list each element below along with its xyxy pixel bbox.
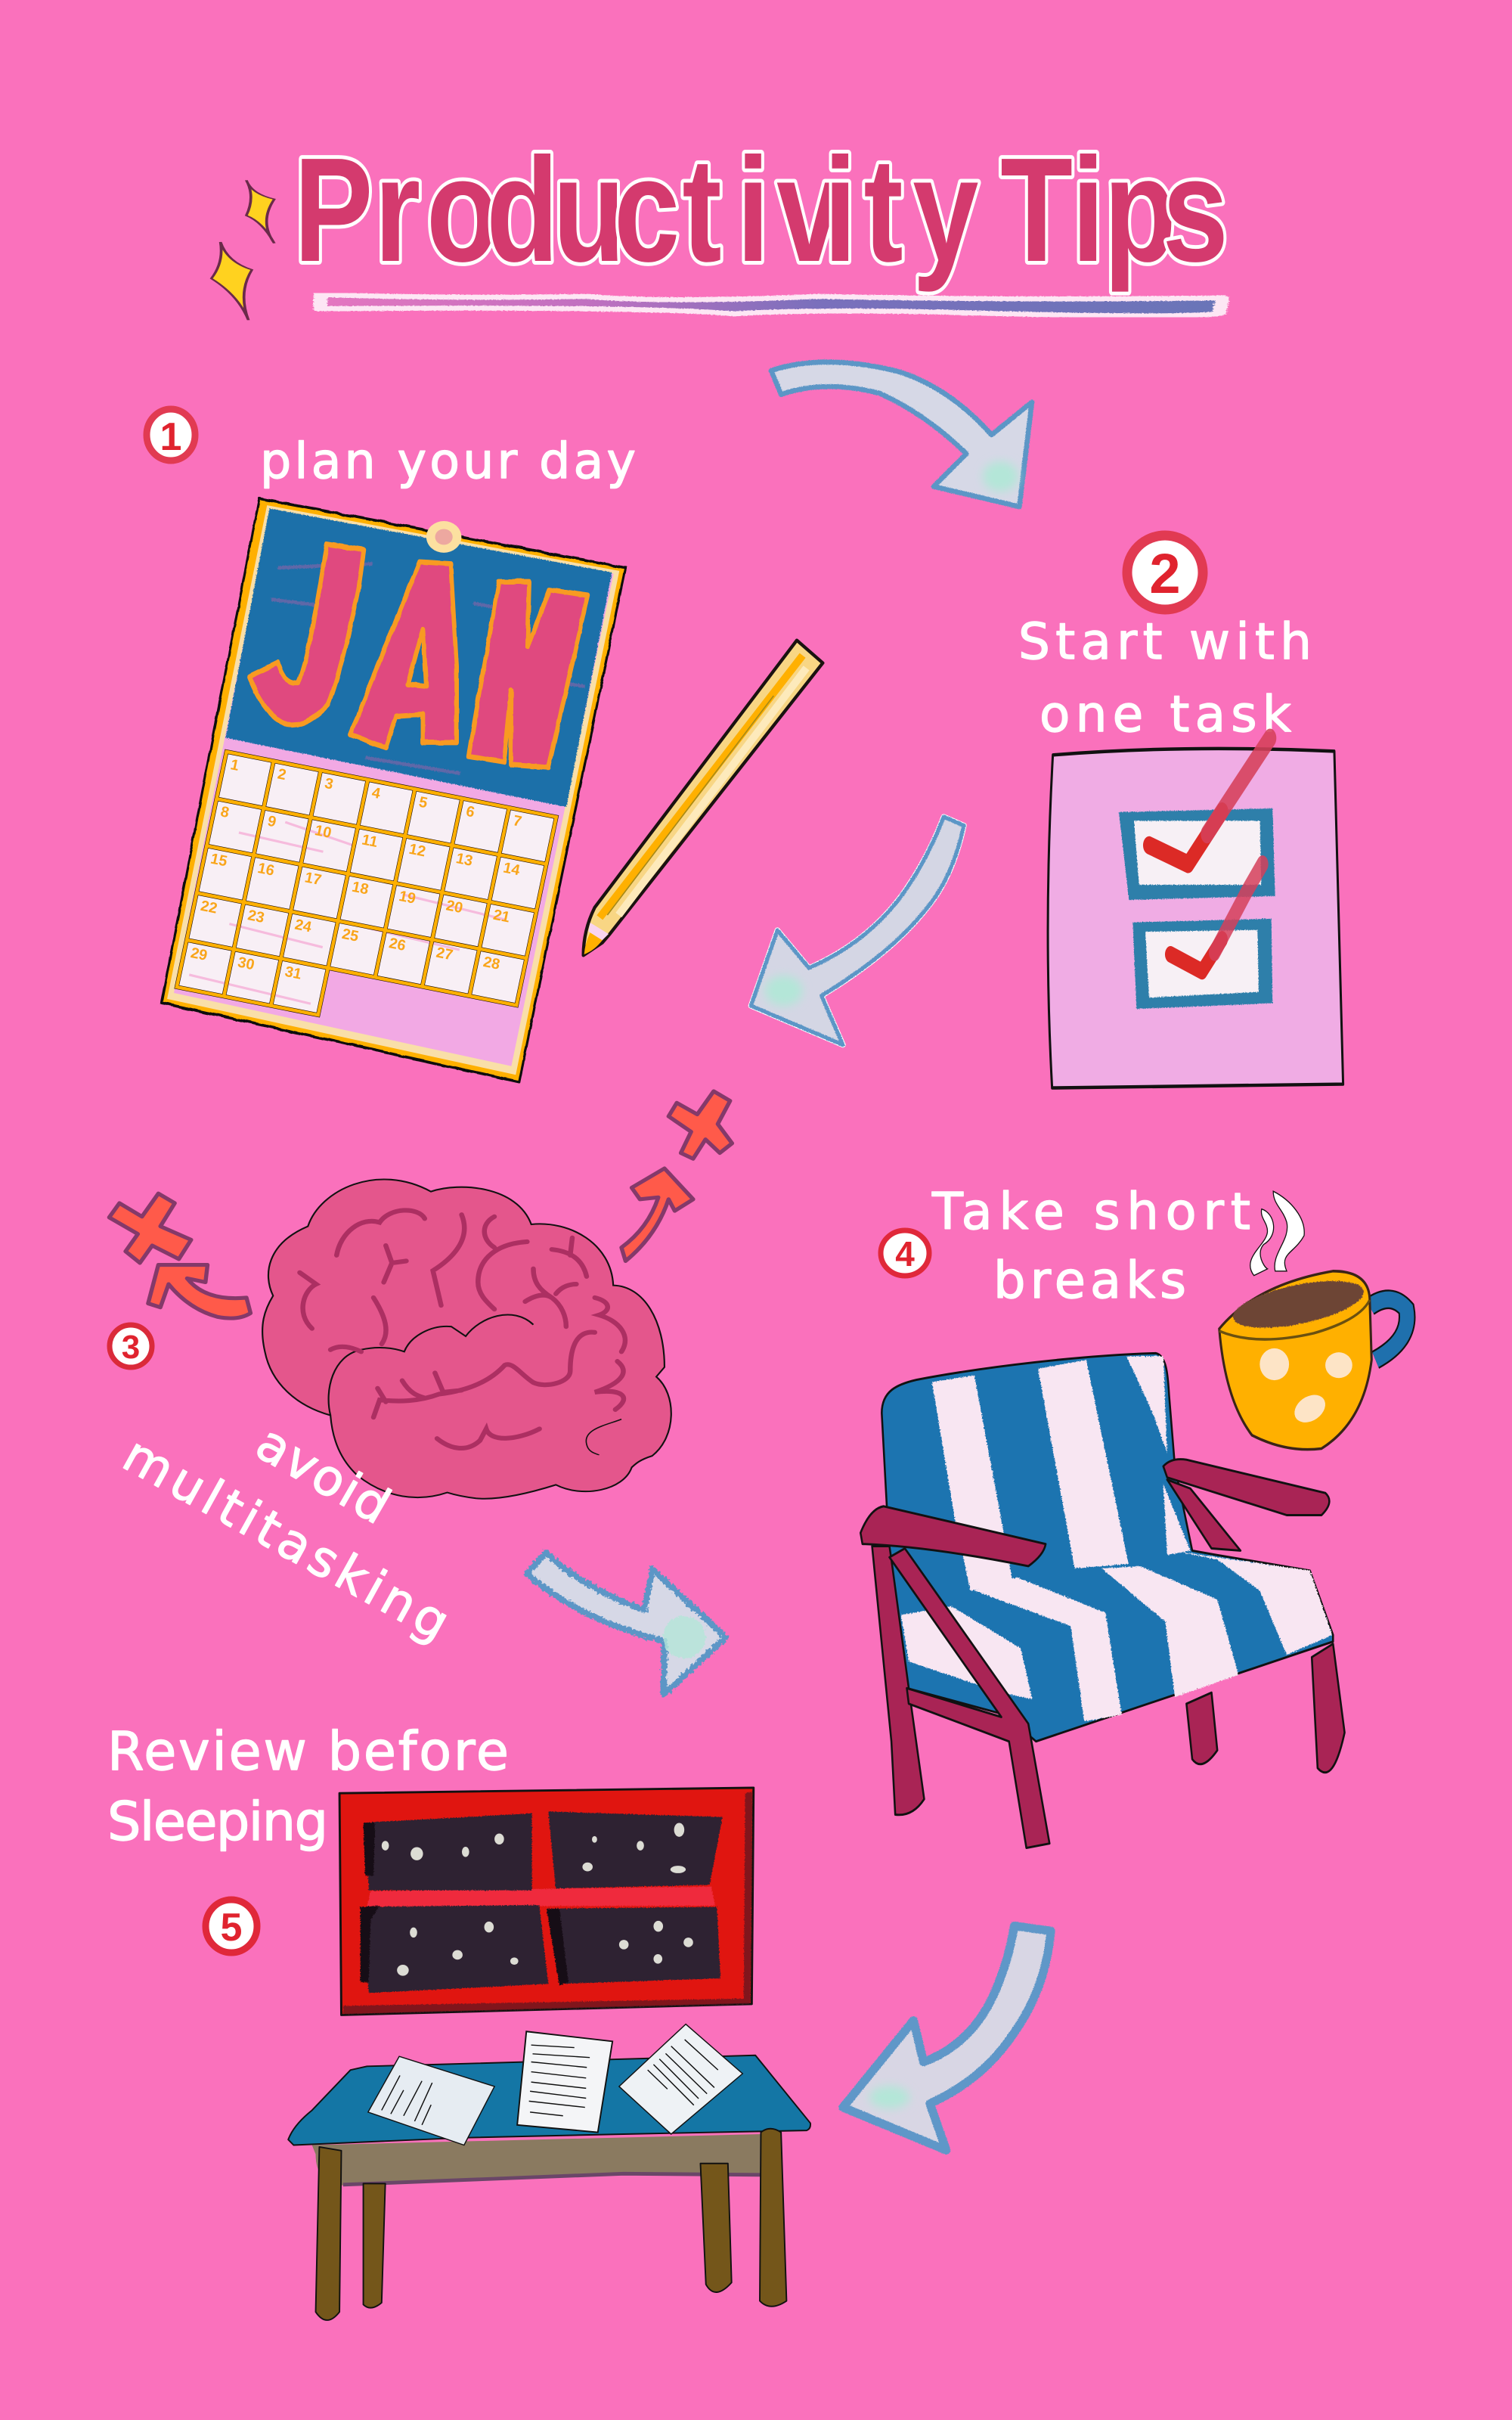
window panes <box>361 1811 723 1993</box>
calendar dates <box>189 756 531 1020</box>
desk apron <box>312 2134 761 2186</box>
stars <box>382 1823 693 1976</box>
badge: step 5: 5 <box>221 1906 242 1950</box>
brain lobe line <box>329 1315 533 1416</box>
arrow: step 4 to step 5 <box>843 1926 1051 2150</box>
steam <box>1250 1191 1304 1276</box>
calendar dates: 14 <box>502 859 522 879</box>
label: avoid multitasking: multitasking <box>113 1426 459 1652</box>
calendar dates: 29 <box>189 945 209 964</box>
calendar dates: 24 <box>293 917 313 935</box>
badge: step 4 <box>881 1230 929 1276</box>
checkmark one <box>1149 738 1270 864</box>
label: start with one task <box>1018 613 1312 743</box>
calendar dates: 9 <box>266 813 277 830</box>
badge: step 5 <box>206 1900 257 1953</box>
badge: step 4: 4 <box>895 1234 915 1274</box>
badge: step 1: 1 <box>160 415 181 459</box>
arrow: step 3 to step 4 <box>527 1553 726 1695</box>
calendar dates: 19 <box>398 888 417 908</box>
calendar dates: 8 <box>219 803 231 821</box>
calendar dates: 16 <box>256 860 276 880</box>
chair stripes <box>901 1356 1332 1721</box>
paper one <box>368 2056 494 2145</box>
label: review before sleeping: Review before <box>107 1720 509 1782</box>
window frame <box>339 1788 754 2015</box>
cup spots <box>1259 1348 1352 1428</box>
calendar paper <box>167 505 619 1075</box>
chair upholstery <box>881 1353 1333 1742</box>
calendar dates: 3 <box>323 775 335 793</box>
panel: window <box>339 1788 754 2015</box>
cup body <box>1219 1271 1371 1450</box>
calendar dates: 25 <box>340 926 360 945</box>
label: plan your day: plan your day <box>260 433 636 490</box>
label: start with one task: Start with <box>1018 613 1312 671</box>
label: take short breaks <box>931 1182 1250 1310</box>
calendar header <box>225 508 612 807</box>
calendar dates: 26 <box>388 935 407 954</box>
icon: pencil <box>584 641 823 955</box>
label: avoid multitasking: avoid <box>246 1413 400 1536</box>
calendar dates: 31 <box>284 963 303 983</box>
calendar dates: 21 <box>491 907 511 926</box>
calendar dates: 28 <box>482 954 501 973</box>
month text: JAN <box>249 544 587 768</box>
desk top <box>288 2055 810 2145</box>
calendar dates: 4 <box>370 784 382 802</box>
calendar dates: 11 <box>361 831 380 851</box>
calendar dates: 22 <box>199 898 218 917</box>
label: review before sleeping: Sleeping <box>107 1791 328 1853</box>
calendar grid <box>177 752 556 1053</box>
cup handle <box>1370 1299 1407 1360</box>
badge: step 3 <box>110 1325 152 1367</box>
badge: step 2: 2 <box>1149 542 1181 605</box>
calendar dates: 6 <box>464 803 476 821</box>
calendar hole <box>426 521 461 553</box>
calendar frame <box>161 498 625 1082</box>
calendar dates: 12 <box>407 841 427 861</box>
label: start with one task: one task <box>1040 685 1292 743</box>
calendar dates: 2 <box>276 766 288 783</box>
arrow: step 2 to step 3 <box>751 817 964 1045</box>
calendar dates: 5 <box>417 794 429 811</box>
title underline <box>321 294 1222 316</box>
calendar dates: 17 <box>303 869 323 889</box>
checkbox two <box>1132 919 1272 1009</box>
icon: sparkles <box>212 180 274 320</box>
calendar dates: 1 <box>229 756 240 774</box>
chair frame <box>860 1460 1345 1848</box>
calendar dates: 23 <box>246 907 266 926</box>
pencil tip <box>584 932 603 954</box>
paper three <box>619 2024 742 2134</box>
checkmark two <box>1170 864 1263 971</box>
calendar dates: 20 <box>445 897 464 917</box>
brain shape <box>262 1179 671 1499</box>
label: review before sleeping <box>107 1720 509 1853</box>
paper two <box>517 2031 612 2133</box>
calendar dates: 27 <box>435 945 454 963</box>
panel: checklist <box>1048 738 1343 1088</box>
calendar dates: 13 <box>454 850 474 870</box>
panel: armchair <box>860 1353 1345 1848</box>
checkbox one <box>1119 808 1275 900</box>
panel: desk <box>288 2024 810 2320</box>
calendar dates: 7 <box>512 812 523 830</box>
arrow: step 1 to step 2 <box>771 362 1032 507</box>
title: ProductivityTips <box>294 126 1228 293</box>
calendar dates: 30 <box>236 954 256 973</box>
label: take short breaks: breaks <box>993 1251 1186 1310</box>
calendar dates: 15 <box>209 851 229 870</box>
desk legs <box>316 2147 732 2320</box>
icon: left cross and arrow <box>109 1193 250 1318</box>
icon: right cross and arrow <box>621 1091 732 1261</box>
badge: step 2 <box>1127 535 1203 610</box>
calendar dates: 18 <box>350 879 370 898</box>
brain folds <box>299 1210 625 1448</box>
panel: calendar <box>161 498 625 1082</box>
label: take short breaks: Take short <box>931 1182 1250 1241</box>
checklist paper <box>1048 749 1343 1088</box>
panel: brain <box>262 1179 671 1499</box>
badge: step 1 <box>147 409 195 461</box>
icon: coffee cup <box>1219 1191 1407 1450</box>
badge: step 3: 3 <box>122 1329 140 1366</box>
calendar dates: 10 <box>313 822 333 842</box>
